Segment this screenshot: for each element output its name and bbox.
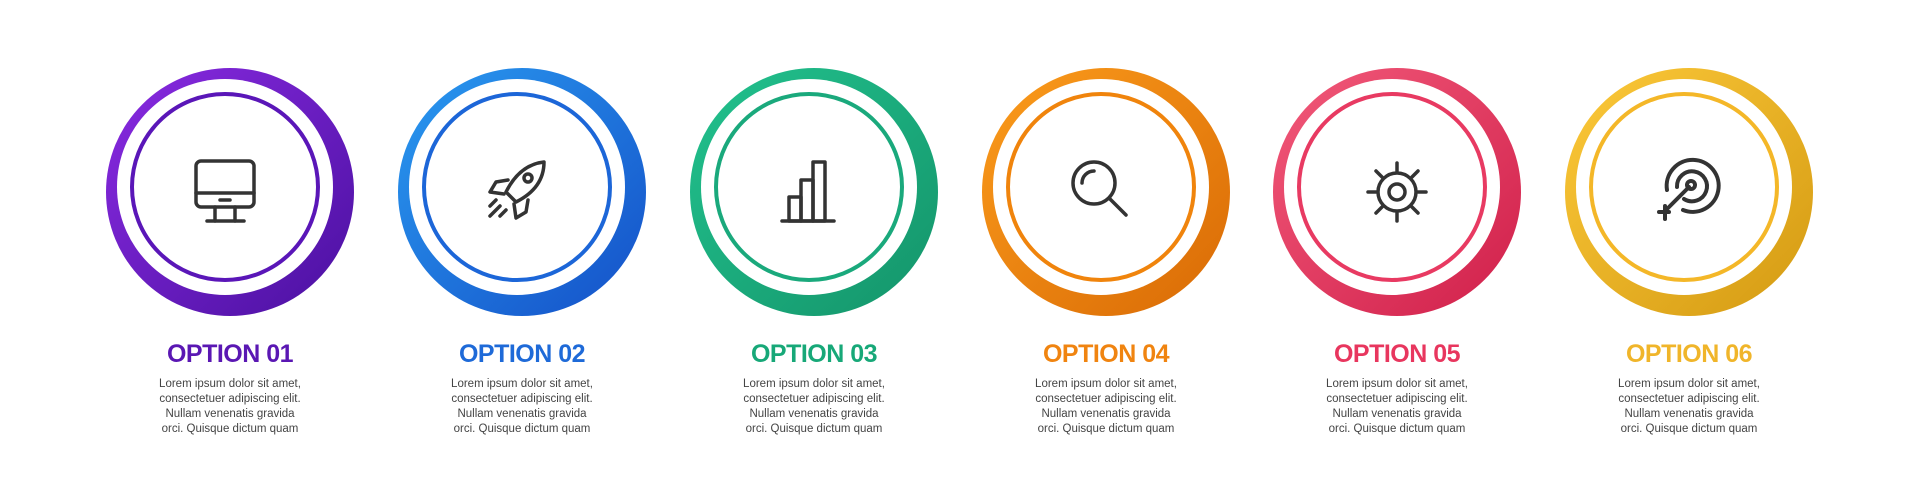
text block bbox=[451, 378, 593, 435]
text block: Nullam venenatis gravida bbox=[1332, 408, 1462, 420]
text block bbox=[1618, 378, 1760, 435]
text block bbox=[743, 378, 885, 435]
text block: consectetuer adipiscing elit. bbox=[451, 393, 593, 405]
text block: orci. Quisque dictum quam bbox=[1329, 423, 1465, 435]
text block: consectetuer adipiscing elit. bbox=[1618, 393, 1760, 405]
text block: consectetuer adipiscing elit. bbox=[743, 393, 885, 405]
heading: OPTION 01 bbox=[167, 340, 293, 368]
text block bbox=[159, 378, 301, 435]
circle with bar chart icon bbox=[690, 68, 938, 316]
circle with gear icon bbox=[1273, 68, 1521, 316]
text block: orci. Quisque dictum quam bbox=[1038, 423, 1174, 435]
text block: Nullam venenatis gravida bbox=[749, 408, 879, 420]
circle with magnifier icon bbox=[982, 68, 1230, 316]
circle with monitor icon bbox=[106, 68, 354, 316]
text block: consectetuer adipiscing elit. bbox=[1035, 393, 1177, 405]
text block: Lorem ipsum dolor sit amet, bbox=[159, 378, 301, 390]
text block: Nullam venenatis gravida bbox=[1041, 408, 1171, 420]
circle with rocket icon bbox=[398, 68, 646, 316]
heading: OPTION 02 bbox=[459, 340, 585, 368]
circle with target icon bbox=[1565, 68, 1813, 316]
text block: Nullam venenatis gravida bbox=[1624, 408, 1754, 420]
heading: OPTION 06 bbox=[1626, 340, 1752, 368]
text block: orci. Quisque dictum quam bbox=[454, 423, 590, 435]
text block: Nullam venenatis gravida bbox=[457, 408, 587, 420]
text block: Lorem ipsum dolor sit amet, bbox=[743, 378, 885, 390]
text block: orci. Quisque dictum quam bbox=[162, 423, 298, 435]
text block: orci. Quisque dictum quam bbox=[746, 423, 882, 435]
text block: Nullam venenatis gravida bbox=[165, 408, 295, 420]
text block: consectetuer adipiscing elit. bbox=[1326, 393, 1468, 405]
panel: option 02 bbox=[398, 68, 646, 435]
text block: Lorem ipsum dolor sit amet, bbox=[451, 378, 593, 390]
text block: consectetuer adipiscing elit. bbox=[159, 393, 301, 405]
heading: OPTION 05 bbox=[1334, 340, 1460, 368]
text block bbox=[1035, 378, 1177, 435]
panel: option 06 bbox=[1565, 68, 1813, 435]
text block: Lorem ipsum dolor sit amet, bbox=[1326, 378, 1468, 390]
panel: option 03 bbox=[690, 68, 938, 435]
text block: Lorem ipsum dolor sit amet, bbox=[1618, 378, 1760, 390]
panel: option 04 bbox=[982, 68, 1230, 435]
panel: option 01 bbox=[106, 68, 354, 435]
text block: Lorem ipsum dolor sit amet, bbox=[1035, 378, 1177, 390]
heading: OPTION 03 bbox=[751, 340, 877, 368]
text block bbox=[1326, 378, 1468, 435]
panel: option 05 bbox=[1273, 68, 1521, 435]
text block: orci. Quisque dictum quam bbox=[1621, 423, 1757, 435]
heading: OPTION 04 bbox=[1043, 340, 1169, 368]
